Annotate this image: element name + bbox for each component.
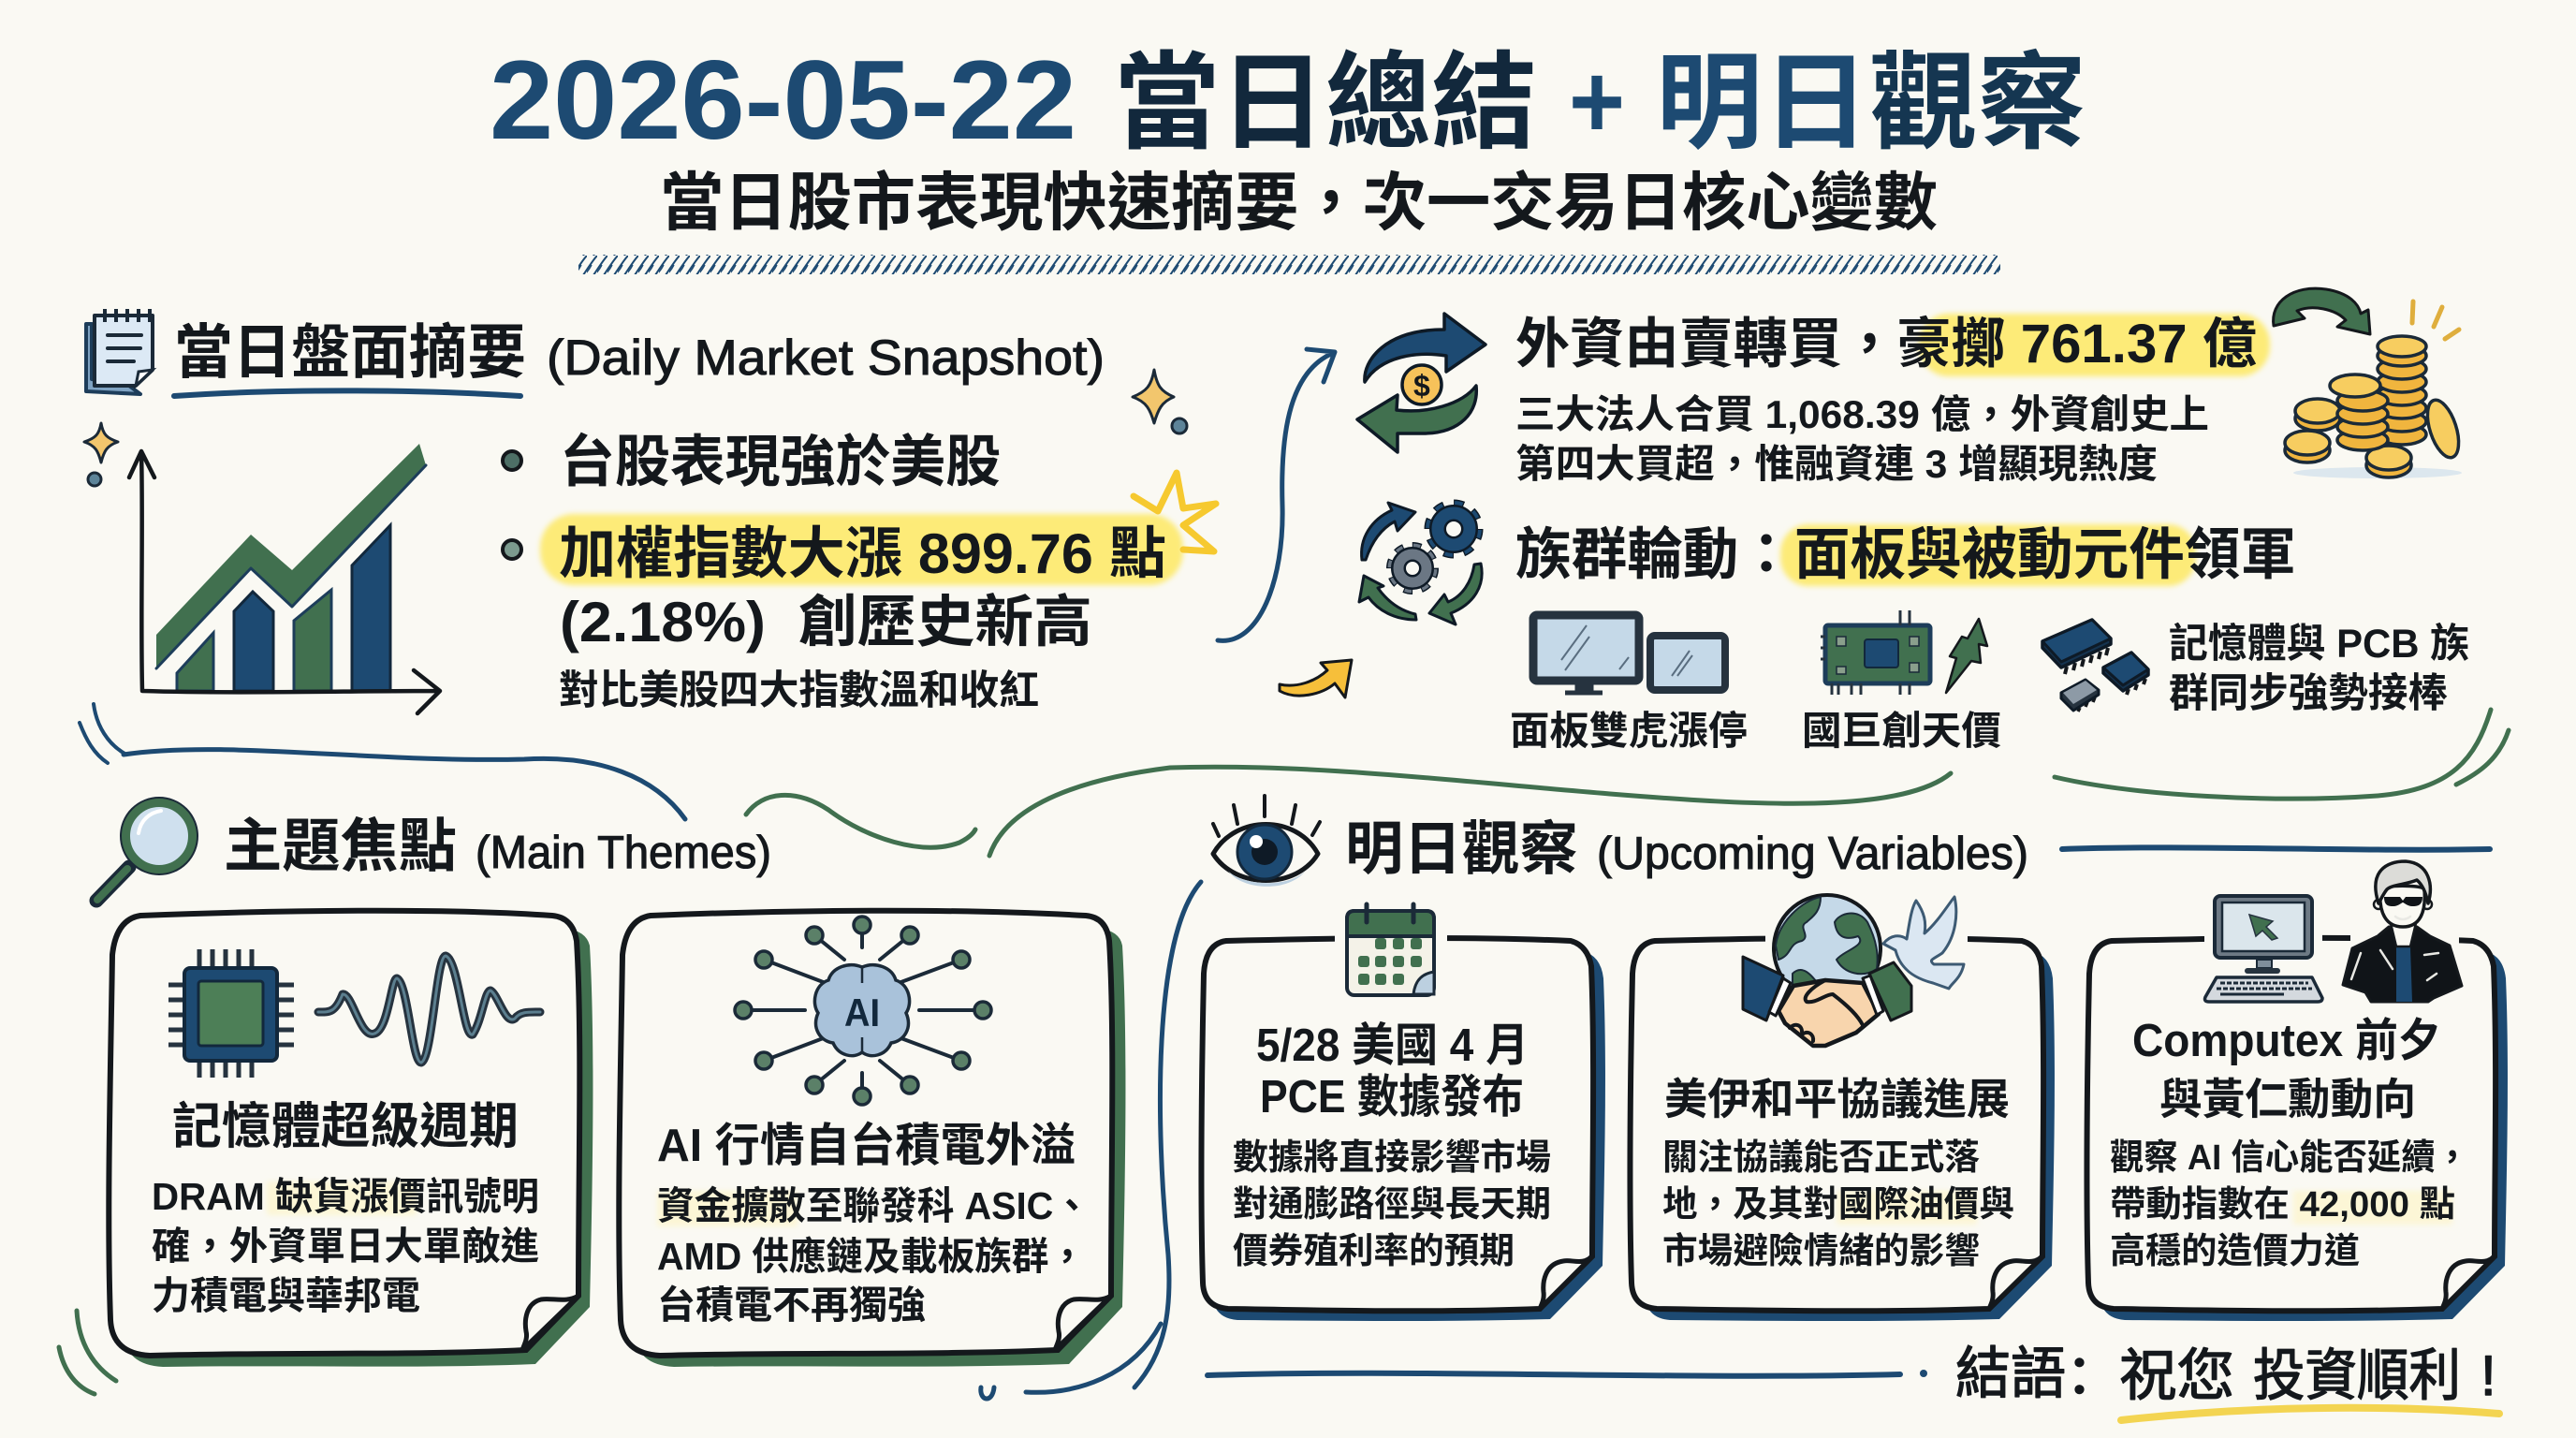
subtitle: 當日股市表現快速摘要，次一交易日核心變數 xyxy=(660,168,1938,239)
icon: money exchange xyxy=(1357,314,1486,452)
icon: circuit board and bolt xyxy=(1821,610,1987,695)
card heading: PCE 數據發布 xyxy=(1260,1072,1524,1123)
title: + xyxy=(1569,43,1625,160)
text: memory and pcb: 群同步強勢接棒 xyxy=(2169,671,2448,716)
card heading: 記憶體超級週期 xyxy=(172,1099,519,1154)
text: memory and pcb: 記憶體與 PCB 族 xyxy=(2169,622,2469,667)
heading: 當日盤面摘要 xyxy=(174,320,526,386)
headline: foreign capital: 外資由賣轉買，豪擲 761.37 億 xyxy=(1515,314,2257,374)
title: 明日 xyxy=(1656,44,1869,162)
card heading: Computex 前夕 xyxy=(2132,1016,2441,1066)
icon: waveform xyxy=(318,956,540,1063)
icon: coin sparks xyxy=(2412,301,2459,339)
heading: 主題焦點 xyxy=(224,814,457,879)
text: foreign capital detail: 第四大買超，惟融資連 3 增顯現熱度 xyxy=(1515,442,2158,486)
closing remark: ! xyxy=(2481,1344,2496,1407)
icon: sparkle right xyxy=(1133,370,1187,433)
panel: pce data xyxy=(1201,904,1605,1321)
icon: rotating gears xyxy=(1359,503,1482,624)
icon: eye xyxy=(1213,796,1320,887)
card heading xyxy=(2132,1016,2441,1123)
panel: us-iran peace xyxy=(1630,895,2055,1321)
arrow: connector to foreign capital xyxy=(1218,349,1335,640)
card body: 高穩的造價力道 xyxy=(2110,1232,2360,1271)
closing remark xyxy=(1955,1343,2499,1420)
text: yageo: 國巨創天價 xyxy=(1802,709,2001,753)
card body: DRAM 缺貨漲價訊號明 xyxy=(152,1175,539,1218)
section heading: main themes xyxy=(96,798,771,901)
icon: coins xyxy=(2285,336,2465,478)
icon: sparkle left xyxy=(84,423,118,486)
closing remark: 結語 xyxy=(1955,1343,2066,1405)
bullet list: market summary xyxy=(503,431,1216,713)
bullet list: market summary: 加權指數大漲 899.76 點 xyxy=(559,522,1166,585)
closing remark: ： xyxy=(2066,1344,2120,1405)
icon: money exchange: $ xyxy=(1413,369,1430,403)
text: foreign capital detail xyxy=(1515,392,2209,486)
card body: AMD 供應鏈及載板族群， xyxy=(657,1235,1086,1278)
card body: 價券殖利率的預期 xyxy=(1233,1232,1515,1271)
closing remark: 祝您 xyxy=(2119,1344,2234,1407)
card body: 力積電與華邦電 xyxy=(152,1274,420,1317)
text: memory and pcb xyxy=(2169,622,2469,716)
icon: ai brain network: AI xyxy=(844,990,880,1034)
card body: 確，外資單日大單敵進 xyxy=(152,1225,539,1268)
card heading: AI 行情自台積電外溢 xyxy=(657,1121,1076,1171)
title: 觀察 xyxy=(1869,44,2086,162)
card body: 對通膨路徑與長天期 xyxy=(1233,1185,1551,1225)
card body xyxy=(152,1175,539,1317)
icon: computer xyxy=(2205,896,2322,1002)
card heading: 與黃仁勳動向 xyxy=(2159,1075,2416,1123)
title: 2026-05-22 xyxy=(490,37,1076,163)
card body xyxy=(657,1184,1090,1327)
heading english: (Daily Market Snapshot) xyxy=(547,330,1105,386)
card body xyxy=(1662,1138,2014,1271)
card body xyxy=(2110,1138,2469,1271)
panel: computex xyxy=(2086,861,2508,1321)
card heading: 5/28 美國 4 月 xyxy=(1256,1020,1529,1071)
heading: 明日觀察 xyxy=(1345,817,1578,882)
section heading: daily market snapshot xyxy=(86,309,1105,396)
card body: 關注協議能否正式落 xyxy=(1662,1138,1980,1178)
icon: chip xyxy=(168,949,294,1078)
card body: 帶動指數在 42,000 點 xyxy=(2110,1185,2455,1225)
card heading: 美伊和平協議進展 xyxy=(1664,1075,2010,1123)
card body: 資金擴散至聯發科 ASIC、 xyxy=(657,1184,1090,1227)
text: panel makers: 面板雙虎漲停 xyxy=(1510,709,1748,753)
card body: 台積電不再獨強 xyxy=(657,1284,926,1327)
arrow: green into coins xyxy=(2274,288,2370,334)
card body: 市場避險情緒的影響 xyxy=(1662,1232,1980,1271)
headline: sector rotation: 族群輪動：面板與被動元件領軍 xyxy=(1515,523,2296,586)
icon: ai brain network xyxy=(735,917,991,1105)
title: 當日總結 xyxy=(1114,44,1537,162)
chart: rising market xyxy=(129,444,440,713)
icon: starburst xyxy=(1134,473,1216,551)
card body: 地，及其對國際油價與 xyxy=(1662,1185,2014,1225)
text: foreign capital detail: 三大法人合買 1,068.39 億，外資創史上 xyxy=(1515,392,2209,436)
bullet list: market summary: 台股表現強於美股 xyxy=(560,431,1001,493)
title xyxy=(490,37,2086,163)
section heading: upcoming variables xyxy=(1213,796,2490,887)
icon: monitor and tablet xyxy=(1533,615,1725,693)
icon: notepad xyxy=(86,309,153,394)
heading english: (Main Themes) xyxy=(476,828,771,878)
icon: memory chips xyxy=(2042,620,2148,712)
card heading xyxy=(1256,1020,1529,1123)
bullet list: market summary: (2.18%) 創歷史新高 xyxy=(560,591,1092,653)
bullet list: market summary: 對比美股四大指數溫和收紅 xyxy=(559,668,1039,713)
arrow: small yellow xyxy=(1280,660,1352,697)
icon: person in leather jacket xyxy=(2343,861,2462,1002)
icon: magnifier xyxy=(96,798,198,901)
heading english: (Upcoming Variables) xyxy=(1597,829,2028,879)
icon: globe handshake and dove xyxy=(1743,895,1964,1046)
panel: ai spillover xyxy=(619,911,1125,1367)
closing remark: 投資順利 xyxy=(2253,1344,2461,1407)
icon: calendar xyxy=(1335,904,1447,995)
card body: 觀察 AI 信心能否延續， xyxy=(2110,1138,2469,1178)
card body xyxy=(1233,1138,1551,1271)
panel: memory supercycle xyxy=(109,911,593,1367)
card body: 數據將直接影響市場 xyxy=(1233,1138,1551,1178)
